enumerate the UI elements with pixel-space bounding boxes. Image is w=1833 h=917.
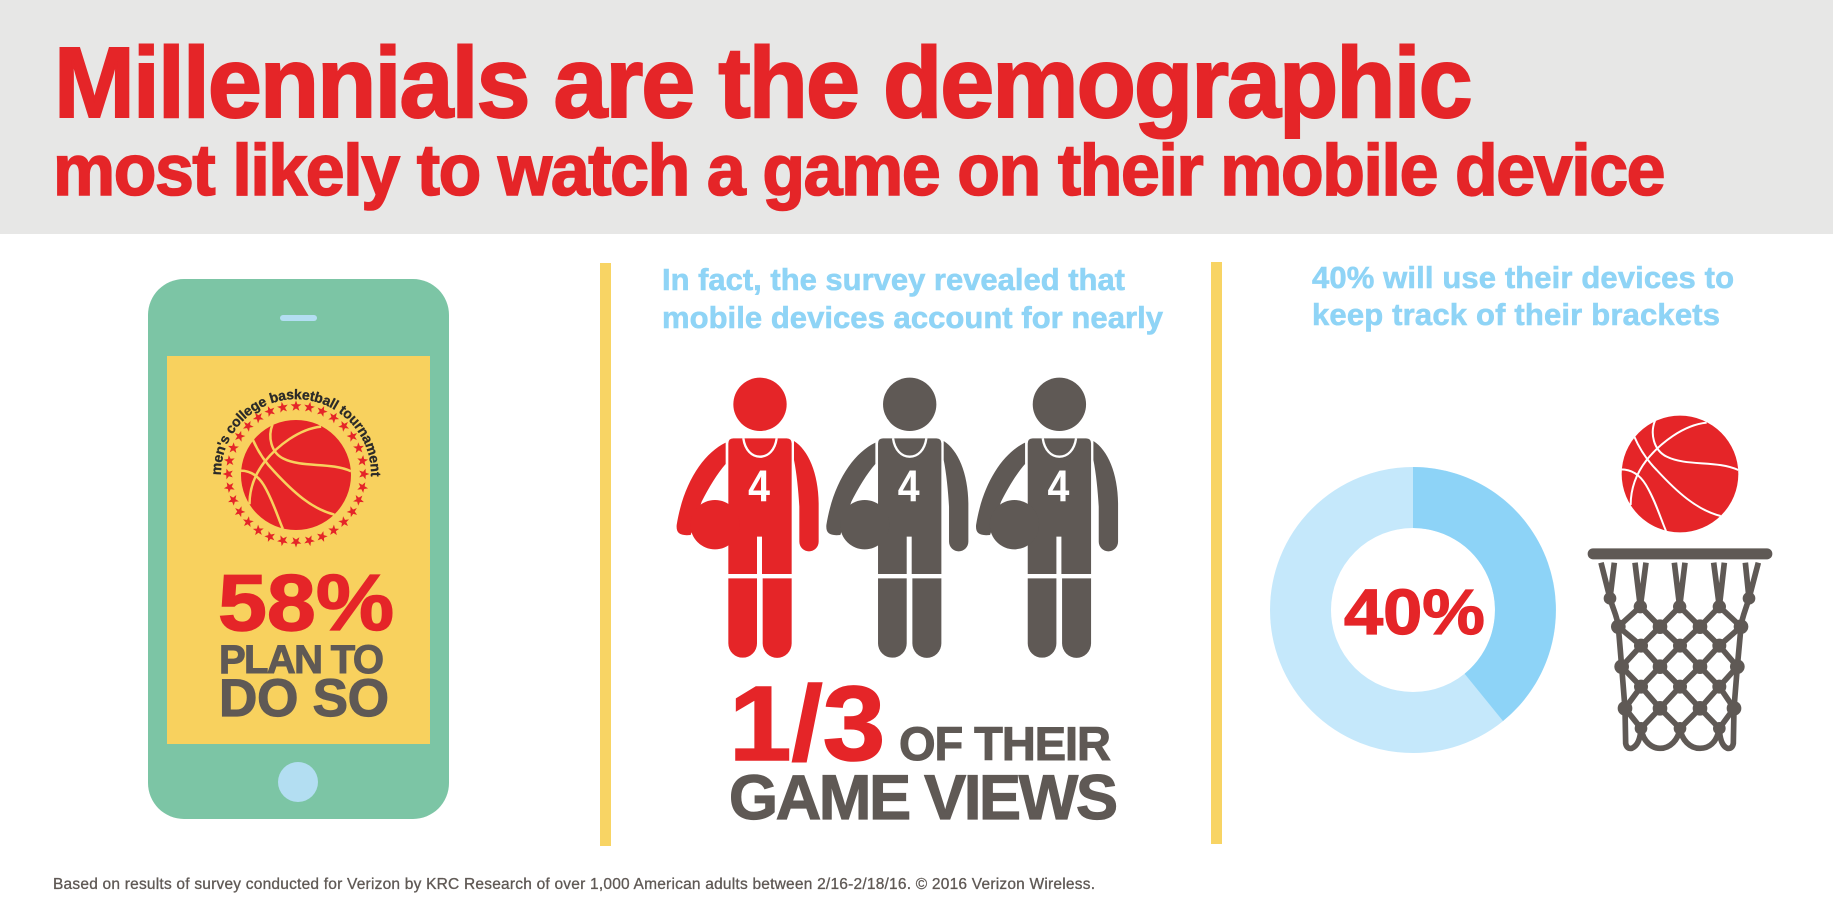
ring of stars [222,400,370,548]
do so label: DO SO [219,669,389,728]
header band with title [0,0,1833,234]
plan to label: PLAN TO [219,638,384,682]
phone body [148,279,449,819]
hoop and net [1588,548,1772,748]
of their label: OF THEIR [899,717,1111,770]
panel: phone [148,279,449,819]
phone speaker [280,315,317,321]
brackets text [1312,260,1734,332]
phone screen [167,356,430,744]
player gray 2: 4 [1047,461,1070,511]
divider bar right [1211,262,1222,844]
intro text: mobile devices account for nearly [662,300,1164,335]
player gray 1 [826,378,968,658]
phone home button [278,762,318,802]
tournament emblem [213,388,380,548]
player gray 2 [976,378,1118,658]
panel: game views [662,262,1164,833]
player red [677,378,819,658]
emblem arc text: men's college basketball tournament [213,388,380,477]
divider bar left [600,263,611,846]
player red: 4 [748,461,770,511]
basketball [1621,416,1738,532]
donut value: 40% [1344,577,1485,648]
player gray 1: 4 [898,461,920,511]
brackets text: keep track of their brackets [1312,297,1720,332]
title line 1: Millennials are the demographic [54,27,1471,138]
donut chart [1300,467,1556,722]
panel: brackets [1300,260,1772,748]
emblem basketball [240,420,351,530]
footnote: Based on results of survey conducted for Verizon by KRC Research of over 1,000 American adults between 2/16-2/18/16. © 2016 Verizon Wireless. [53,876,1095,893]
game views label: GAME VIEWS [729,763,1118,833]
stat 58%: 58% [218,558,394,647]
stat 1/3: 1/3 [729,665,885,783]
brackets text: 40% will use their devices to [1312,260,1734,295]
intro text [662,262,1164,335]
title line 2: most likely to watch a game on their mobile device [53,131,1664,211]
intro text: In fact, the survey revealed that [662,262,1125,297]
